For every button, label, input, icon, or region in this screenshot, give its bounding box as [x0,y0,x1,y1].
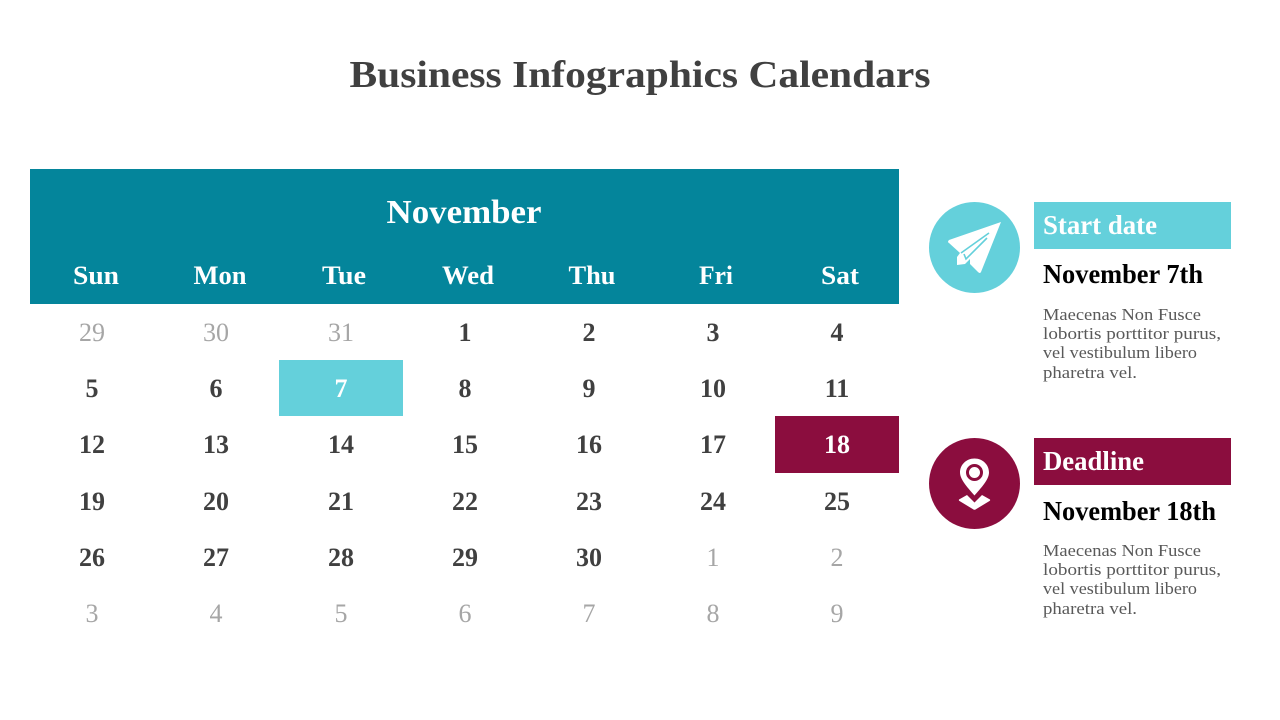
deadline description: vel vestibulum libero [1043,579,1197,598]
start date description: Maecenas Non Fusce [1043,305,1201,324]
calendar day numbers: 14 [328,430,354,459]
start date description: pharetra vel. [1043,363,1137,382]
calendar day numbers: 31 [328,318,354,347]
calendar day numbers: 24 [700,487,726,516]
calendar day numbers: 20 [203,487,229,516]
calendar day numbers: 11 [825,374,849,403]
calendar day numbers: 18 [824,430,850,459]
calendar day numbers: 4 [830,318,844,347]
calendar day numbers: 5 [334,599,348,628]
highlight: deadline cell [775,416,899,473]
calendar day numbers: 15 [452,430,478,459]
start date description: lobortis porttitor purus, [1043,324,1221,343]
calendar day numbers [79,318,850,628]
calendar day numbers: 30 [576,543,602,572]
calendar day numbers: 28 [328,543,354,572]
weekday labels: Sun [73,261,120,290]
calendar header band [30,169,899,304]
weekday labels: Sat [821,261,859,290]
icon: map pin [929,438,1020,529]
start date description [1043,305,1221,382]
weekday labels [73,261,859,290]
calendar day numbers: 8 [458,374,472,403]
deadline label: Deadline [1043,446,1144,476]
weekday labels: Thu [568,261,616,290]
calendar day numbers: 9 [830,599,844,628]
calendar day numbers: 7 [334,374,348,403]
calendar day numbers: 5 [86,374,98,403]
calendar day numbers: 6 [210,374,222,403]
deadline description: lobortis porttitor purus, [1043,560,1221,579]
calendar day numbers: 3 [86,599,98,628]
calendar day numbers: 1 [458,318,472,347]
calendar day numbers: 17 [700,430,726,459]
calendar day numbers: 6 [458,599,472,628]
calendar day numbers: 1 [706,543,720,572]
calendar day numbers: 9 [582,374,596,403]
calendar day numbers: 25 [824,487,850,516]
calendar day numbers: 4 [210,599,222,628]
start date label [1034,202,1231,249]
calendar day numbers: 26 [79,543,105,572]
calendar day numbers: 2 [582,318,596,347]
deadline value: November 18th [1043,496,1216,526]
calendar day numbers: 23 [576,487,602,516]
weekday labels: Tue [322,261,366,290]
title: Business Infographics Calendars [350,54,930,96]
calendar day numbers: 21 [328,487,354,516]
deadline description: Maecenas Non Fusce [1043,541,1201,560]
deadline description [1043,541,1221,618]
calendar day numbers: 19 [79,487,105,516]
calendar day numbers: 7 [582,599,596,628]
weekday labels: Mon [194,261,247,290]
start date description: vel vestibulum libero [1043,343,1197,362]
calendar day numbers: 27 [203,543,229,572]
start date label: Start date [1043,210,1157,240]
calendar day numbers: 29 [79,318,105,347]
calendar day numbers: 16 [576,430,602,459]
calendar day numbers: 29 [452,543,478,572]
calendar day numbers: 2 [830,543,844,572]
month name: November [386,194,542,231]
panel: calendar [30,169,899,628]
calendar day numbers: 12 [79,430,105,459]
weekday labels: Fri [699,261,733,290]
calendar day numbers: 3 [706,318,720,347]
panel: deadline [929,438,1231,618]
deadline label [1034,438,1231,485]
deadline description: pharetra vel. [1043,599,1137,618]
calendar day numbers: 13 [203,430,229,459]
panel: start date [929,202,1231,382]
calendar day numbers: 22 [452,487,478,516]
calendar day numbers: 30 [203,318,229,347]
weekday labels: Wed [442,261,495,290]
calendar day numbers: 10 [700,374,726,403]
calendar day numbers: 8 [706,599,720,628]
icon: paper plane [929,202,1020,293]
start date value: November 7th [1043,259,1203,289]
highlight: start date cell [279,360,403,416]
